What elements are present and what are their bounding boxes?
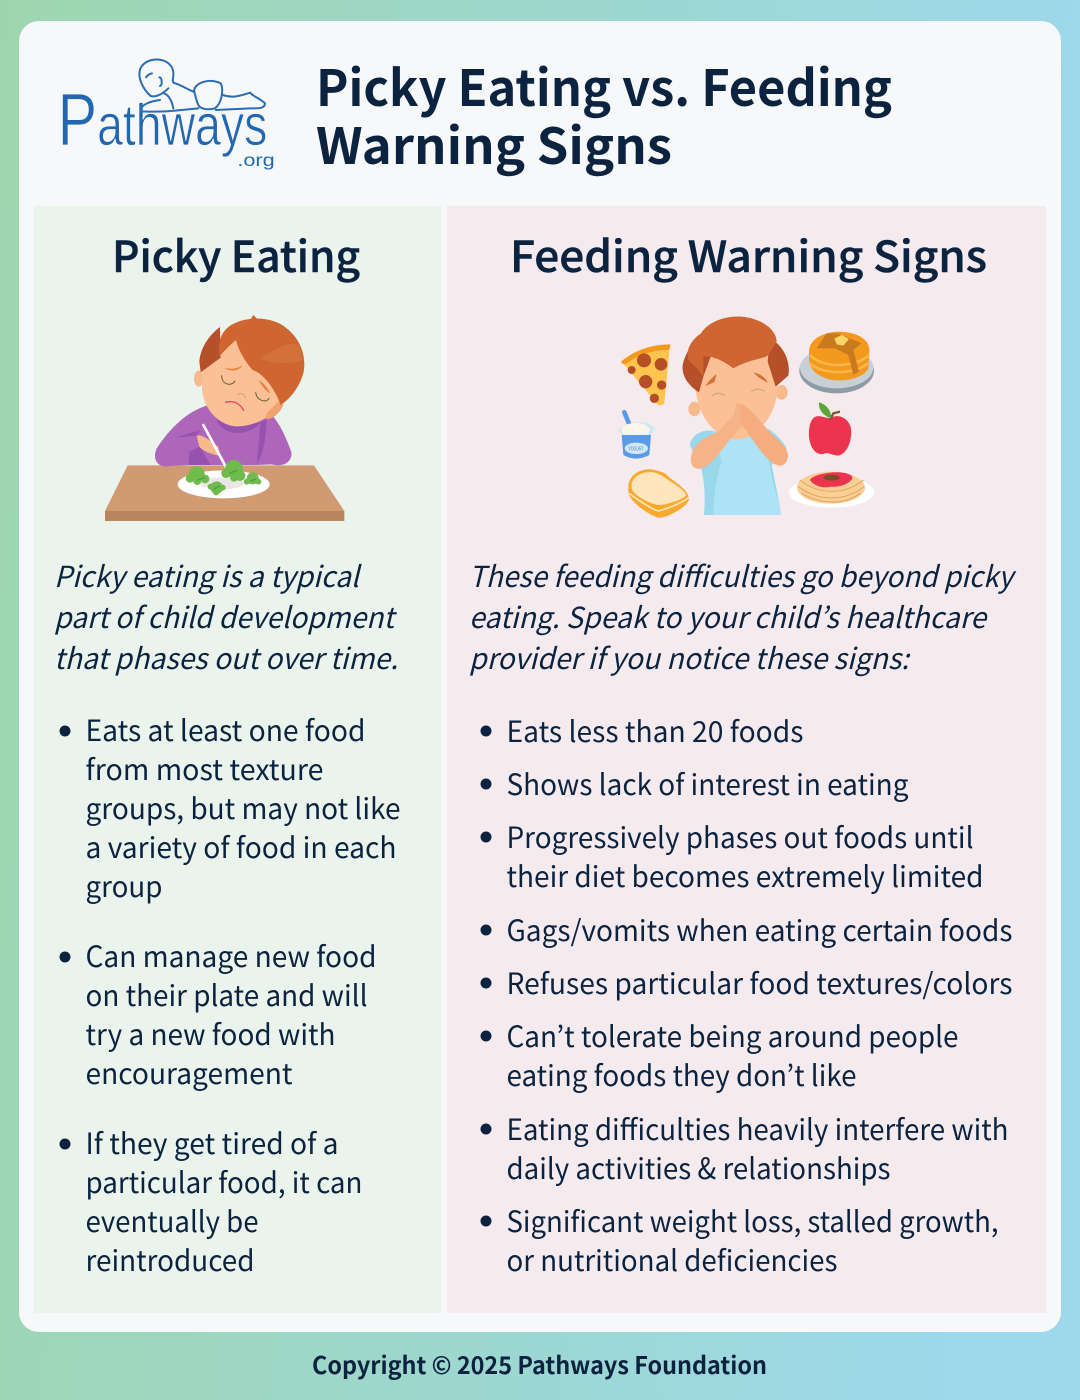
logo .org: .org (237, 150, 275, 170)
item: phases out foods (480, 815, 984, 896)
item: food can be reintroduced: particular food, it can (86, 1160, 362, 1202)
yogurt: YOGURT (628, 446, 644, 452)
item: weight loss: or nutritional deficiencies (506, 1238, 838, 1280)
footer copyright: Copyright © 2025 Pathways Foundation (312, 1346, 767, 1381)
item: weight loss (480, 1199, 998, 1280)
heading: picky eating: Picky Eating (112, 223, 360, 285)
item: weight loss: Significant weight loss, stalled growth, (506, 1199, 998, 1241)
yogurt (618, 412, 655, 459)
item: can manage new food (60, 934, 376, 1093)
item: food can be reintroduced: reintroduced (86, 1238, 254, 1280)
item: can manage new food: on their plate and will (86, 973, 368, 1015)
item: interferes with daily life (480, 1107, 1008, 1188)
item: gags or vomits: Gags/vomits when eating certain foods (506, 908, 1012, 950)
intro: picky eating (54, 554, 398, 678)
logo wordmark: Pathways (58, 79, 267, 162)
item: lack of interest: Shows lack of interest in eating (506, 762, 908, 804)
intro: warning signs: eating. Speak to your child’s healthcare (469, 595, 989, 637)
title: Picky Eating vs. Feeding (316, 49, 892, 121)
panel: picky eating (34, 206, 441, 1313)
logo baby outline (139, 59, 265, 112)
title (316, 49, 892, 179)
item: cannot tolerate others eating: eating foods they don’t like (506, 1053, 856, 1095)
intro: warning signs: provider if you notice these signs: (469, 636, 911, 678)
item: eats one food per texture group: groups, but may not like (86, 786, 400, 828)
item: food can be reintroduced (60, 1121, 362, 1280)
panel: feeding warning signs (447, 206, 1046, 1313)
intro: picky eating: Picky eating is a typical (54, 554, 363, 596)
illustration: boy eating broccoli (105, 315, 344, 521)
intro: picky eating: that phases out over time. (54, 636, 398, 678)
intro: warning signs (469, 554, 1017, 678)
bread (628, 469, 689, 518)
item: food can be reintroduced: eventually be (86, 1199, 258, 1241)
boy (683, 317, 789, 515)
item: phases out foods: their diet becomes extremely limited (506, 854, 984, 896)
logo: Pathways.org (58, 59, 275, 170)
illustration: boy refusing foods (618, 317, 874, 518)
item: food can be reintroduced: If they get tired of a (86, 1121, 338, 1163)
list: picky eating traits (60, 708, 400, 1280)
title: Warning Signs (316, 107, 672, 179)
item: cannot tolerate others eating: Can’t tolerate being around people (506, 1014, 958, 1056)
intro: warning signs: These feeding difficulties go beyond picky (469, 554, 1017, 596)
item: interferes with daily life: Eating difficulties heavily interfere with (506, 1107, 1008, 1149)
spaghetti (789, 472, 874, 508)
apple (809, 402, 851, 456)
item: eats one food per texture group: group (86, 864, 162, 906)
item: eats one food per texture group: a variety of food in each (86, 825, 396, 867)
item: eats one food per texture group: from most texture (86, 747, 324, 789)
intro: picky eating: part of child development (54, 595, 397, 637)
item: fewer than 20 foods: Eats less than 20 foods (506, 709, 804, 751)
item: interferes with daily life: daily activities & relationships (506, 1146, 890, 1188)
list: warning signs (480, 709, 1012, 1280)
pancakes (799, 332, 874, 393)
item: can manage new food: try a new food with (86, 1012, 336, 1054)
pizza (621, 344, 670, 405)
item: refuses textures: Refuses particular food textures/colors (506, 961, 1012, 1003)
item: eats one food per texture group: Eats at least one food (86, 708, 366, 750)
heading: feeding warning signs: Feeding Warning Signs (510, 223, 987, 285)
item: can manage new food: encouragement (86, 1051, 293, 1093)
item: can manage new food: Can manage new food (86, 934, 376, 976)
item: phases out foods: Progressively phases out foods until (506, 815, 974, 857)
item: cannot tolerate others eating (480, 1014, 958, 1095)
item: eats one food per texture group (60, 708, 400, 906)
